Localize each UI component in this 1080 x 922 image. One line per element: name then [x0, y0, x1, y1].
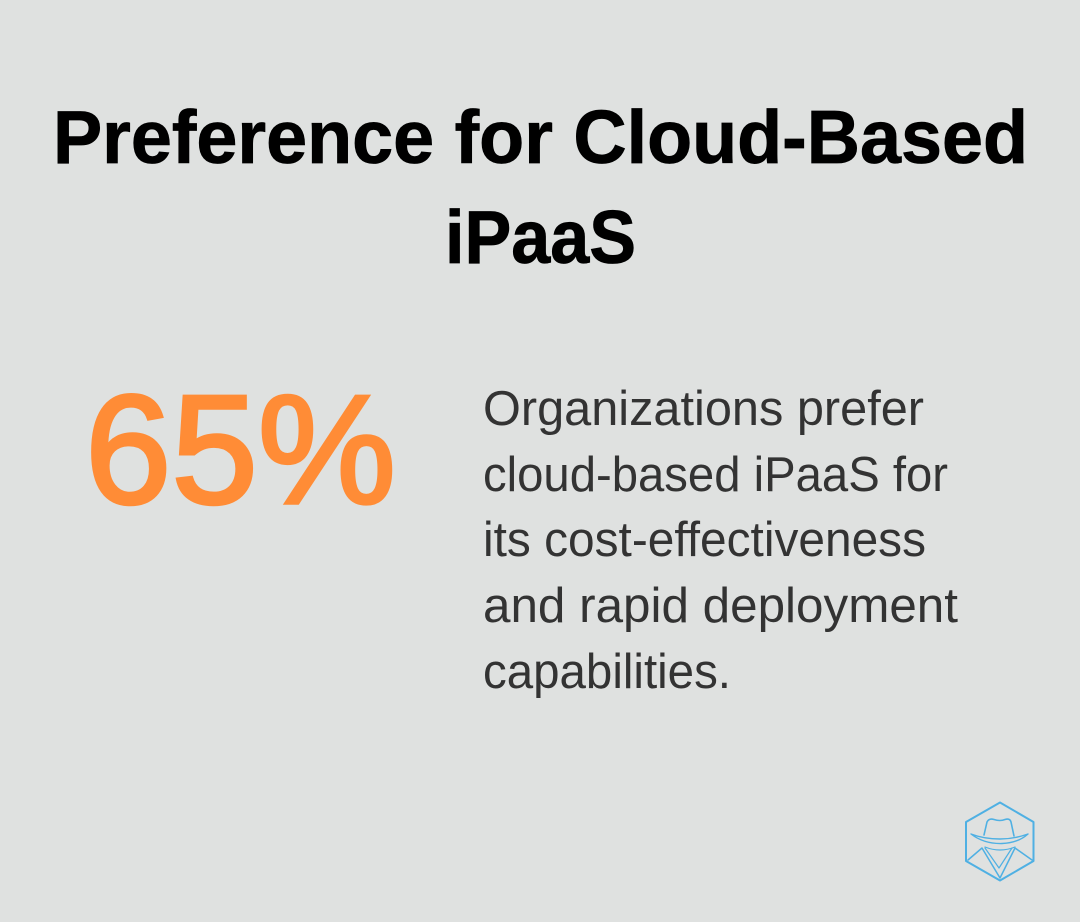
description text [483, 382, 958, 699]
description text: cloud-based iPaaS for [483, 448, 948, 502]
title [53, 95, 1028, 279]
description text: Organizations prefer [483, 382, 924, 436]
statistic: 65%: 65% [85, 363, 396, 536]
title: Preference for Cloud-Based [53, 95, 1028, 179]
description text: capabilities. [483, 645, 731, 699]
description text: its cost-effectiveness [483, 513, 926, 567]
description text: and rapid deployment [483, 579, 958, 633]
title: iPaaS [445, 195, 636, 279]
icon: hexagon logo with hat and collar [966, 802, 1034, 880]
